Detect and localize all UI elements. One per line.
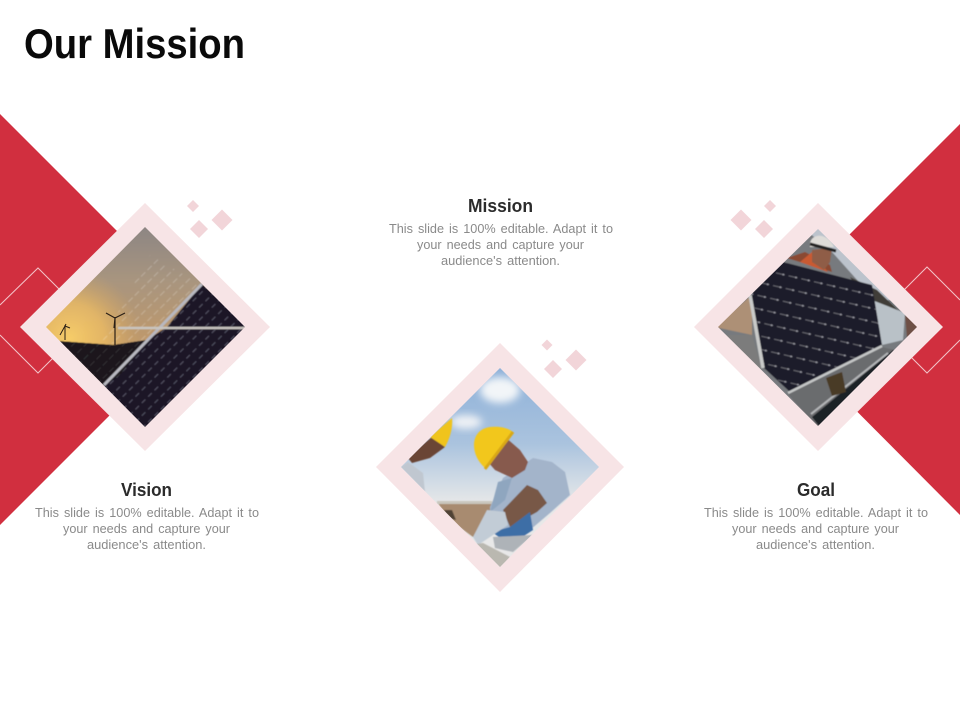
distant ground xyxy=(437,502,492,537)
title: Our Mission xyxy=(24,20,245,67)
face xyxy=(488,437,528,478)
panel: goal text block xyxy=(704,480,928,552)
right building xyxy=(872,300,905,345)
worker xyxy=(787,252,832,272)
text: mission description: audience's attention. xyxy=(441,254,560,268)
panel: right red diamond background xyxy=(765,124,960,515)
image: worker carrying solar panel xyxy=(715,225,920,430)
heading: mission: Mission xyxy=(468,196,533,216)
text: goal description: This slide is 100% editable. Adapt it to xyxy=(704,506,928,520)
image: wind turbines and solar panel at sunset xyxy=(40,220,250,430)
worker shirt xyxy=(490,458,570,530)
text: goal description: your needs and capture your xyxy=(732,522,899,536)
icon: center decorative diamonds xyxy=(542,340,586,378)
text: goal description: audience's attention. xyxy=(756,538,875,552)
panel: goal photo frame xyxy=(694,200,943,451)
icon: goal decorative diamonds xyxy=(730,200,776,238)
icon: vision decorative diamonds xyxy=(187,200,232,238)
metal frame xyxy=(493,535,533,552)
text: vision description: This slide is 100% editable. Adapt it to xyxy=(35,506,259,520)
panel: vision photo frame xyxy=(20,200,270,451)
sky and hill xyxy=(812,229,890,301)
glove xyxy=(473,510,508,545)
text: mission description: This slide is 100% editable. Adapt it to xyxy=(389,222,613,236)
heading: vision: Vision xyxy=(121,480,172,500)
heading: goal: Goal xyxy=(797,480,835,500)
panel: vision text block xyxy=(35,480,259,552)
image: workers in yellow hard hats xyxy=(401,368,599,567)
solar panel xyxy=(750,262,882,392)
panel: center photo frame xyxy=(376,340,624,592)
under panel xyxy=(787,347,895,430)
text: goal description xyxy=(704,506,928,552)
panel: mission text block xyxy=(389,196,613,268)
overalls xyxy=(494,512,534,538)
text: vision description: your needs and capture your xyxy=(63,522,230,536)
left worker xyxy=(401,462,425,492)
text: mission description xyxy=(389,222,613,268)
text: vision description: audience's attention. xyxy=(87,538,206,552)
ground left xyxy=(718,298,752,336)
text: vision description xyxy=(35,506,259,552)
hard hat xyxy=(474,427,513,468)
text: mission description: your needs and capture your xyxy=(417,238,584,252)
worker arm xyxy=(503,485,547,527)
panel: left red diamond background xyxy=(0,114,206,525)
